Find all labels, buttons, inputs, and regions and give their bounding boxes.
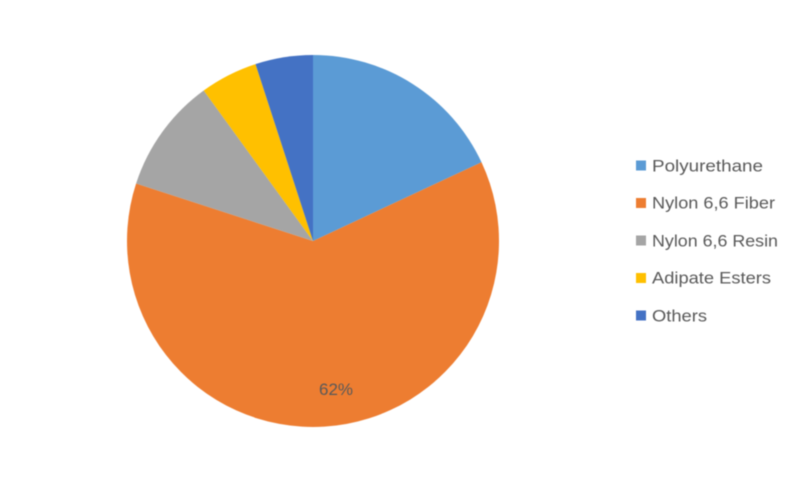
slice: Polyurethane [313, 55, 482, 241]
legend item: Nylon 6,6 Resin: Nylon 6,6 Resin [652, 232, 778, 250]
slice: Nylon 6,6 Fiber [127, 162, 499, 427]
pie chart [127, 55, 499, 427]
slice: Nylon 6,6 Resin [136, 90, 313, 241]
legend item: Nylon 6,6 Fiber: Nylon 6,6 Fiber [652, 194, 775, 212]
data label: 62%: 62% [319, 380, 353, 399]
legend item: Others: Others [652, 306, 707, 326]
legend [636, 156, 778, 326]
slice: Adipate Esters [204, 64, 313, 241]
legend item: Polyurethane: Polyurethane [652, 156, 763, 176]
legend item: Adipate Esters: Adipate Esters [652, 268, 771, 288]
slice: Others [256, 55, 313, 241]
